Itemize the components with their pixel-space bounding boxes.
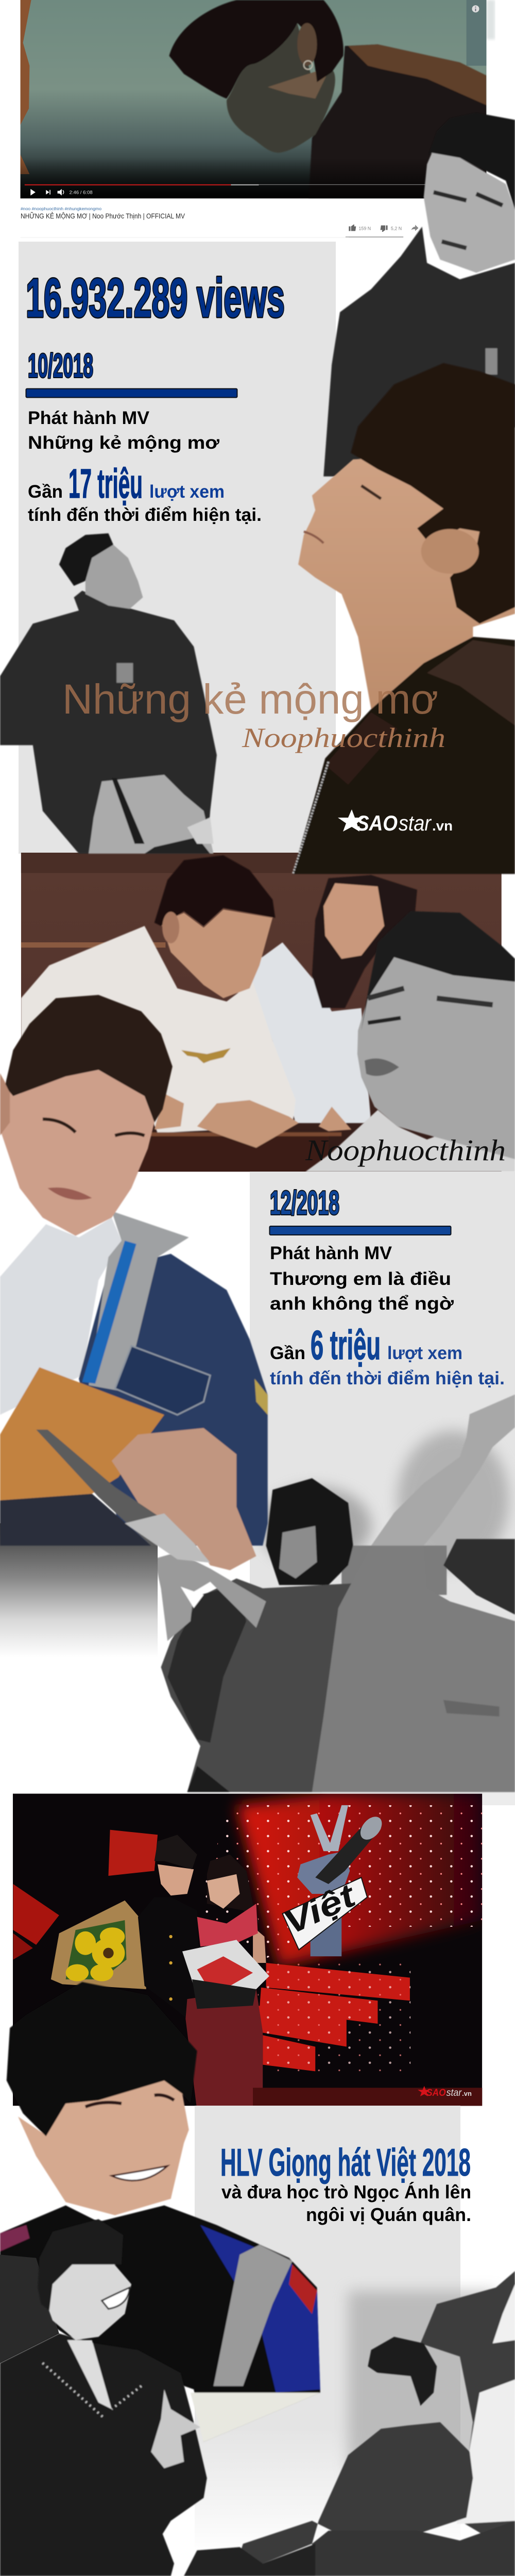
text block: coach description: và đưa học trò Ngọc Ánh lên (221, 2181, 471, 2202)
text block: first MV release: Phát hành MV (28, 408, 149, 428)
logo: SAOstar first (338, 809, 453, 835)
coach figure (138, 1835, 197, 2001)
logo: The Voice hand and mic (278, 1805, 386, 1956)
video frame: YouTube screenshot (21, 0, 495, 198)
text block: second MV release: Thương em là điều (270, 1268, 451, 1289)
logo: SAOstar small on stage photo: SAO (426, 2087, 446, 2098)
logo: SAOstar small on stage photo: star (447, 2087, 462, 2098)
text block: second MV release: lượt xem (387, 1343, 462, 1363)
text block: second MV release: tính đến thời điểm hiện tại. (270, 1368, 505, 1388)
photo: The Voice stage with coach and winner (13, 1794, 483, 2111)
decorative shadow tail of second block (482, 1792, 515, 1805)
logo: SAOstar first: .vn (432, 818, 453, 834)
text block: second MV release (270, 1243, 505, 1388)
text block: first MV release: Gần (28, 481, 63, 502)
logo: SAOstar small on stage photo: .vn (462, 2090, 472, 2097)
video meta: likes and dislikes (21, 225, 419, 238)
video meta: title: NHỮNG KẺ MỘNG MƠ | Noo Phước Thịnh | OFFICIAL MV (21, 212, 185, 220)
panel: grey background first block (19, 242, 336, 854)
panel: grey background second block (250, 1172, 515, 1793)
photo: grayscale dance figures (154, 1395, 515, 1792)
photo: grayscale man sitting in jacket (0, 533, 217, 854)
video meta: hashtags: #noo #noophuocthinh #nhungkemongmo (21, 206, 101, 211)
logo: SAOstar first: SAO (356, 811, 398, 835)
signature: Noophuocthinh black: Noophuocthinh (305, 1133, 506, 1167)
text block: coach description: ngôi vị Quán quân. (306, 2204, 471, 2225)
text block: second MV release: anh không thể ngờ (270, 1293, 454, 1314)
text block: coach description (221, 2181, 471, 2225)
icon: info (472, 5, 479, 12)
text block: second MV release: Phát hành MV (270, 1243, 392, 1263)
icon: video player controls (30, 189, 93, 195)
sunflower bouquet (51, 1901, 146, 1989)
gray man in classroom photo (305, 911, 515, 1172)
logo: The Voice hand and mic: Việt (278, 1876, 363, 1941)
video progress bar (25, 184, 426, 185)
video meta: likes and dislikes: 5,2 N (391, 226, 402, 231)
video meta: likes and dislikes: 159 N (358, 226, 371, 231)
photo: brown-hair man looking up (293, 363, 515, 874)
divider bar (270, 1226, 451, 1235)
text block: first MV release: lượt xem (149, 481, 225, 502)
logo: SAOstar small on stage photo (418, 2086, 472, 2098)
photo: seated coach in chair (184, 2271, 515, 2576)
signature: Noophuocthinh brown: Noophuocthinh (242, 722, 445, 753)
text block: first MV release: 17 triệu (68, 461, 143, 506)
stage steps (258, 1963, 410, 2071)
panel: grey background third block (195, 2106, 460, 2554)
heading: 16.932.289 views: 16.932.289 views (26, 267, 285, 329)
divider bar (26, 388, 237, 398)
photo: smiling boy reading paper (0, 995, 268, 1657)
date: 10/2018: 10/2018 (28, 347, 93, 384)
photo: classroom scene (21, 853, 515, 1172)
logo: SAOstar first: star (399, 811, 432, 835)
photo: big smiling coach face (0, 1982, 320, 2442)
winner figure (182, 1854, 269, 2111)
text block: second MV release: 6 triệu (311, 1322, 381, 1368)
text block: first MV release: Những kẻ mộng mơ (28, 432, 220, 453)
title: Những kẻ mộng mơ: Những kẻ mộng mơ (62, 676, 438, 723)
photo: laughing coach grayscale (0, 2219, 207, 2576)
photo: dark jacket man top right (323, 113, 515, 477)
text block: first MV release: tính đến thời điểm hiện tại. (28, 504, 262, 525)
icon: video player controls: 2:46 / 6:08 (70, 190, 93, 195)
date: 12/2018: 12/2018 (270, 1184, 339, 1222)
text block: first MV release (28, 408, 262, 525)
text block: second MV release: Gần (270, 1343, 305, 1363)
